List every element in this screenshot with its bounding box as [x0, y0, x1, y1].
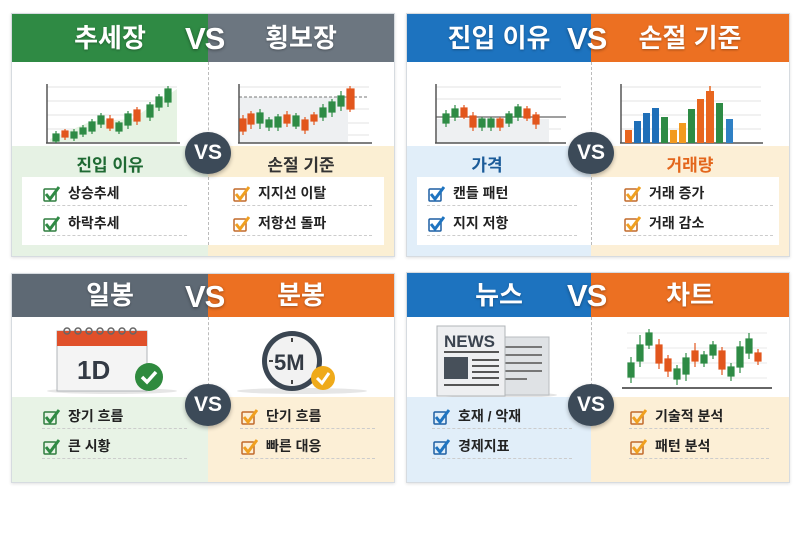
icon: calendar 1D	[47, 327, 177, 394]
icon: newspaper	[436, 326, 557, 397]
vs text: VS	[567, 278, 606, 313]
header right: 분봉: 분봉	[277, 280, 325, 310]
item: 호재 / 악재	[432, 404, 572, 429]
header right: 손절 기준	[591, 14, 789, 62]
header left: 추세장: 추세장	[74, 23, 146, 53]
vs circle: VS	[194, 141, 222, 164]
vs circle: VS	[577, 141, 605, 164]
panel: trend vs sideways	[11, 13, 395, 257]
item: 캔들 패턴: 캔들 패턴	[453, 185, 508, 201]
chart: price candles	[435, 84, 566, 144]
lower backgrounds	[407, 146, 591, 256]
vs text: VS	[185, 279, 224, 314]
header right: 횡보장: 횡보장	[265, 23, 337, 53]
header right: 손절 기준: 손절 기준	[639, 23, 741, 53]
header left: 추세장	[12, 14, 208, 62]
icon: newspaper: NEWS	[444, 332, 495, 351]
chart: candles	[622, 329, 772, 389]
item: 단기 흐름	[240, 404, 375, 429]
panel: entry reason vs stop loss	[406, 13, 790, 257]
vs circle: VS	[194, 393, 222, 416]
header right: 차트: 차트	[666, 280, 714, 310]
vs circle	[185, 132, 231, 174]
item: 단기 흐름: 단기 흐름	[266, 408, 321, 424]
vs circle	[568, 384, 614, 426]
lower backgrounds	[12, 397, 208, 482]
list box	[417, 177, 779, 245]
item: 상승추세	[42, 181, 187, 206]
item: 큰 시황: 큰 시황	[68, 438, 111, 454]
item: 경제지표: 경제지표	[458, 438, 510, 454]
item: 큰 시황	[42, 434, 187, 459]
item: 패턴 분석	[629, 434, 769, 459]
item: 빠른 대응: 빠른 대응	[266, 438, 321, 454]
item: 거래 감소	[623, 211, 773, 236]
item: 캔들 패턴	[427, 181, 577, 206]
item: 거래 증가	[623, 181, 773, 206]
vs circle: VS	[577, 393, 605, 416]
item: 기술적 분석: 기술적 분석	[655, 408, 723, 424]
chart: sideways candles	[238, 84, 372, 144]
vs circle	[185, 384, 231, 426]
vs text: VS	[567, 21, 606, 56]
icon: calendar 1D: 1D	[77, 355, 110, 385]
header left: 진입 이유	[407, 14, 591, 62]
icon: clock 5M: 5M	[274, 350, 305, 375]
panel: news vs chart	[406, 272, 790, 483]
item: 하락추세: 하락추세	[68, 215, 120, 231]
item: 지지 저항: 지지 저항	[453, 215, 508, 231]
chart: volume bars	[620, 84, 763, 144]
item: 호재 / 악재: 호재 / 악재	[458, 408, 521, 424]
lower backgrounds	[407, 397, 591, 482]
header left: 일봉: 일봉	[86, 280, 134, 310]
item: 장기 흐름: 장기 흐름	[68, 408, 123, 424]
item: 지지선 이탈: 지지선 이탈	[258, 185, 326, 201]
vs circle	[568, 132, 614, 174]
item: 빠른 대응	[240, 434, 375, 459]
icon: clock 5M	[237, 331, 367, 394]
heading: 거래량: 거래량	[667, 156, 713, 175]
item: 패턴 분석: 패턴 분석	[655, 438, 710, 454]
heading: 손절 기준: 손절 기준	[267, 156, 335, 175]
item: 경제지표	[432, 434, 572, 459]
item: 거래 감소: 거래 감소	[649, 215, 704, 231]
heading: 가격: 가격	[471, 156, 503, 175]
header left: 진입 이유: 진입 이유	[448, 23, 550, 53]
header left: 일봉	[12, 274, 208, 317]
item: 상승추세: 상승추세	[68, 185, 120, 201]
item: 하락추세	[42, 211, 187, 236]
list box	[22, 177, 384, 245]
header right: 분봉	[208, 274, 394, 317]
heading: 진입 이유: 진입 이유	[76, 156, 144, 175]
item: 지지 저항	[427, 211, 577, 236]
header right: 횡보장	[208, 14, 394, 62]
chart: uptrend candles	[46, 84, 180, 144]
panel: daily vs minute	[11, 273, 395, 483]
header left: 뉴스: 뉴스	[475, 280, 523, 310]
item: 거래 증가: 거래 증가	[649, 185, 704, 201]
item: 저항선 돌파: 저항선 돌파	[258, 215, 326, 231]
item: 장기 흐름	[42, 404, 187, 429]
header left: 뉴스	[407, 273, 591, 317]
item: 기술적 분석	[629, 404, 769, 429]
header right: 차트	[591, 273, 789, 317]
item: 지지선 이탈	[232, 181, 372, 206]
item: 저항선 돌파	[232, 211, 372, 236]
vs text: VS	[185, 21, 224, 56]
lower left background	[12, 146, 208, 256]
